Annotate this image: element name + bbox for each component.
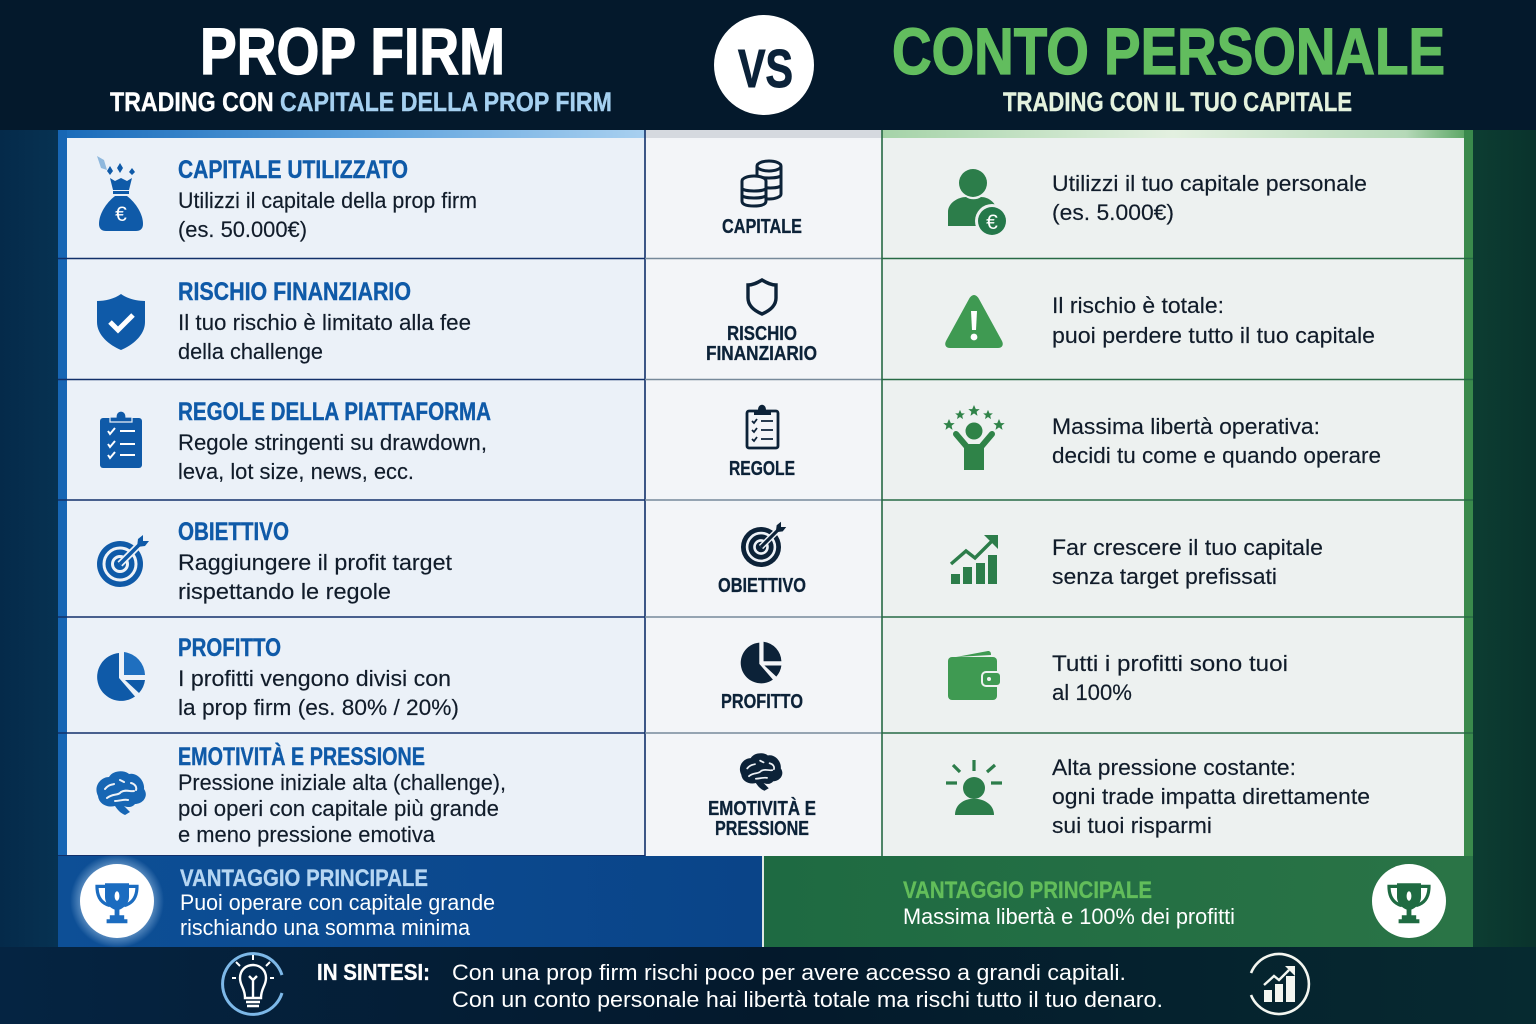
description: Il rischio è totale: [1052, 293, 1224, 318]
description: la prop firm (es. 80% / 20%) [178, 695, 459, 720]
text: Con una prop firm rischi poco per avere accesso a grandi capitali. [452, 960, 1126, 985]
description: Puoi operare con capitale grande [180, 890, 495, 915]
heading: EMOTIVITÀ E PRESSIONE [178, 742, 425, 771]
heading: OBIETTIVO [178, 518, 289, 546]
description: Utilizzi il tuo capitale personale [1052, 171, 1367, 196]
row: capitale personale [948, 169, 1367, 238]
icon: trophy badge [70, 854, 164, 948]
icon: person with euro [948, 169, 1009, 238]
label: PRESSIONE [715, 818, 809, 840]
category: obiettivo [718, 522, 806, 597]
description: Far crescere il tuo capitale [1052, 535, 1323, 560]
description [1052, 293, 1375, 348]
text: Con un conto personale hai libertà totale ma rischi tutto il tuo denaro. [452, 987, 1163, 1012]
description: Regole stringenti su drawdown, [178, 430, 487, 455]
description [178, 188, 477, 242]
row: pressione [946, 755, 1370, 838]
description: puoi perdere tutto il tuo capitale [1052, 323, 1375, 348]
row: emotivita e pressione [96, 742, 506, 847]
text [452, 960, 1163, 1012]
icon: shield check [97, 294, 145, 350]
label: IN SINTESI: [317, 959, 430, 985]
row: obiettivo [97, 518, 452, 604]
icon: brain [96, 771, 146, 815]
summary bar [223, 954, 1309, 1014]
description: I profitti vengono divisi con [178, 666, 451, 691]
description: Pressione iniziale alta (challenge), [178, 770, 506, 795]
description [1052, 535, 1323, 589]
description: al 100% [1052, 680, 1132, 705]
icon: trophy badge [1372, 864, 1446, 938]
header: prop firm subtitle: TRADING CON CAPITALE DELLA PROP FIRM [110, 87, 612, 117]
label: PROFITTO [721, 691, 803, 713]
heading: PROFITTO [178, 634, 281, 662]
heading: CAPITALE UTILIZZATO [178, 156, 408, 184]
row: rischio finanziario [97, 278, 471, 364]
description: Massima libertà e 100% dei profitti [903, 904, 1235, 929]
header: prop firm title: PROP FIRM [200, 14, 505, 88]
description [1052, 171, 1367, 225]
label [706, 323, 817, 365]
description: Raggiungere il profit target [178, 550, 452, 575]
panel: vantaggio prop firm [58, 854, 762, 948]
description: ogni trade impatta direttamente [1052, 784, 1370, 809]
heading: RISCHIO FINANZIARIO [178, 278, 411, 306]
icon: growth chart [951, 535, 998, 584]
description [178, 430, 487, 484]
icon: stressed person [946, 760, 1002, 815]
description: poi operi con capitale più grande [178, 796, 499, 821]
description: Massima libertà operativa: [1052, 414, 1320, 439]
heading: REGOLE DELLA PIATTAFORMA [178, 398, 491, 426]
heading: VANTAGGIO PRINCIPALE [903, 877, 1152, 904]
description: sui tuoi risparmi [1052, 813, 1212, 838]
description: rischiando una somma minima [180, 915, 471, 940]
description [1052, 414, 1381, 468]
row: rischio totale [945, 293, 1375, 348]
icon: person with stars [943, 405, 1005, 470]
row: profitti [948, 651, 1288, 705]
description: Alta pressione costante: [1052, 755, 1296, 780]
icon: pie chart [97, 652, 145, 701]
row: crescita [951, 535, 1323, 589]
description [178, 550, 452, 604]
description: e meno pressione emotiva [178, 822, 436, 847]
row: profitto [97, 634, 459, 720]
icon: warning triangle [945, 295, 1003, 348]
icon: person with euro: € [986, 211, 998, 234]
icon: target [97, 535, 149, 587]
icon: coins [742, 161, 781, 206]
left panel: prop firm rows [96, 156, 506, 847]
label: OBIETTIVO [718, 575, 806, 597]
vs badge: VS [738, 39, 793, 99]
icon: target [741, 522, 786, 567]
vs badge [714, 15, 814, 115]
icon: clipboard checklist [100, 411, 142, 468]
category: rischio finanziario [706, 280, 817, 365]
comparison table frame [58, 130, 1473, 856]
icon: money bag: € [115, 203, 127, 226]
label [708, 797, 816, 840]
icon: shield outline [748, 280, 776, 314]
description: rispettando le regole [178, 579, 391, 604]
description: Il tuo rischio è limitato alla fee [178, 310, 471, 335]
label: CAPITALE [722, 216, 802, 238]
description: senza target prefissati [1052, 564, 1277, 589]
icon: clipboard outline [747, 405, 778, 448]
category: regole [729, 405, 795, 480]
description [180, 890, 495, 940]
description [178, 310, 471, 364]
row: capitale utilizzato [97, 156, 477, 242]
category: capitale [722, 161, 802, 238]
icon: money bag [97, 156, 143, 231]
row: regole della piattaforma [100, 398, 491, 484]
description: Utilizzi il capitale della prop firm [178, 188, 477, 213]
label: FINANZIARIO [706, 343, 817, 365]
icon: growth circle [1251, 954, 1309, 1014]
label: REGOLE [729, 458, 795, 480]
description: (es. 5.000€) [1052, 200, 1174, 225]
description: Tutti i profitti sono tuoi [1052, 651, 1288, 676]
description [1052, 651, 1288, 705]
category: profitto [721, 642, 803, 713]
icon: brain [740, 753, 782, 791]
label: EMOTIVITÀ E [708, 797, 816, 820]
row: liberta operativa [943, 405, 1381, 470]
description: della challenge [178, 339, 323, 364]
description: decidi tu come e quando operare [1052, 443, 1381, 468]
description: (es. 50.000€) [178, 217, 307, 242]
description: leva, lot size, news, ecc. [178, 459, 414, 484]
heading: VANTAGGIO PRINCIPALE [180, 865, 428, 892]
panel: vantaggio conto personale [762, 856, 1473, 947]
icon: wallet [948, 651, 1001, 700]
right panel: conto personale rows [943, 169, 1381, 838]
description [178, 666, 459, 720]
icon: light bulb [223, 954, 282, 1014]
center panel: categories [706, 161, 817, 840]
description [178, 770, 506, 847]
label: RISCHIO [727, 323, 797, 345]
description [1052, 755, 1370, 838]
header: conto personale subtitle: TRADING CON IL TUO CAPITALE [1003, 87, 1352, 117]
icon: pie chart [741, 642, 781, 683]
category: emotivita e pressione [708, 753, 816, 840]
